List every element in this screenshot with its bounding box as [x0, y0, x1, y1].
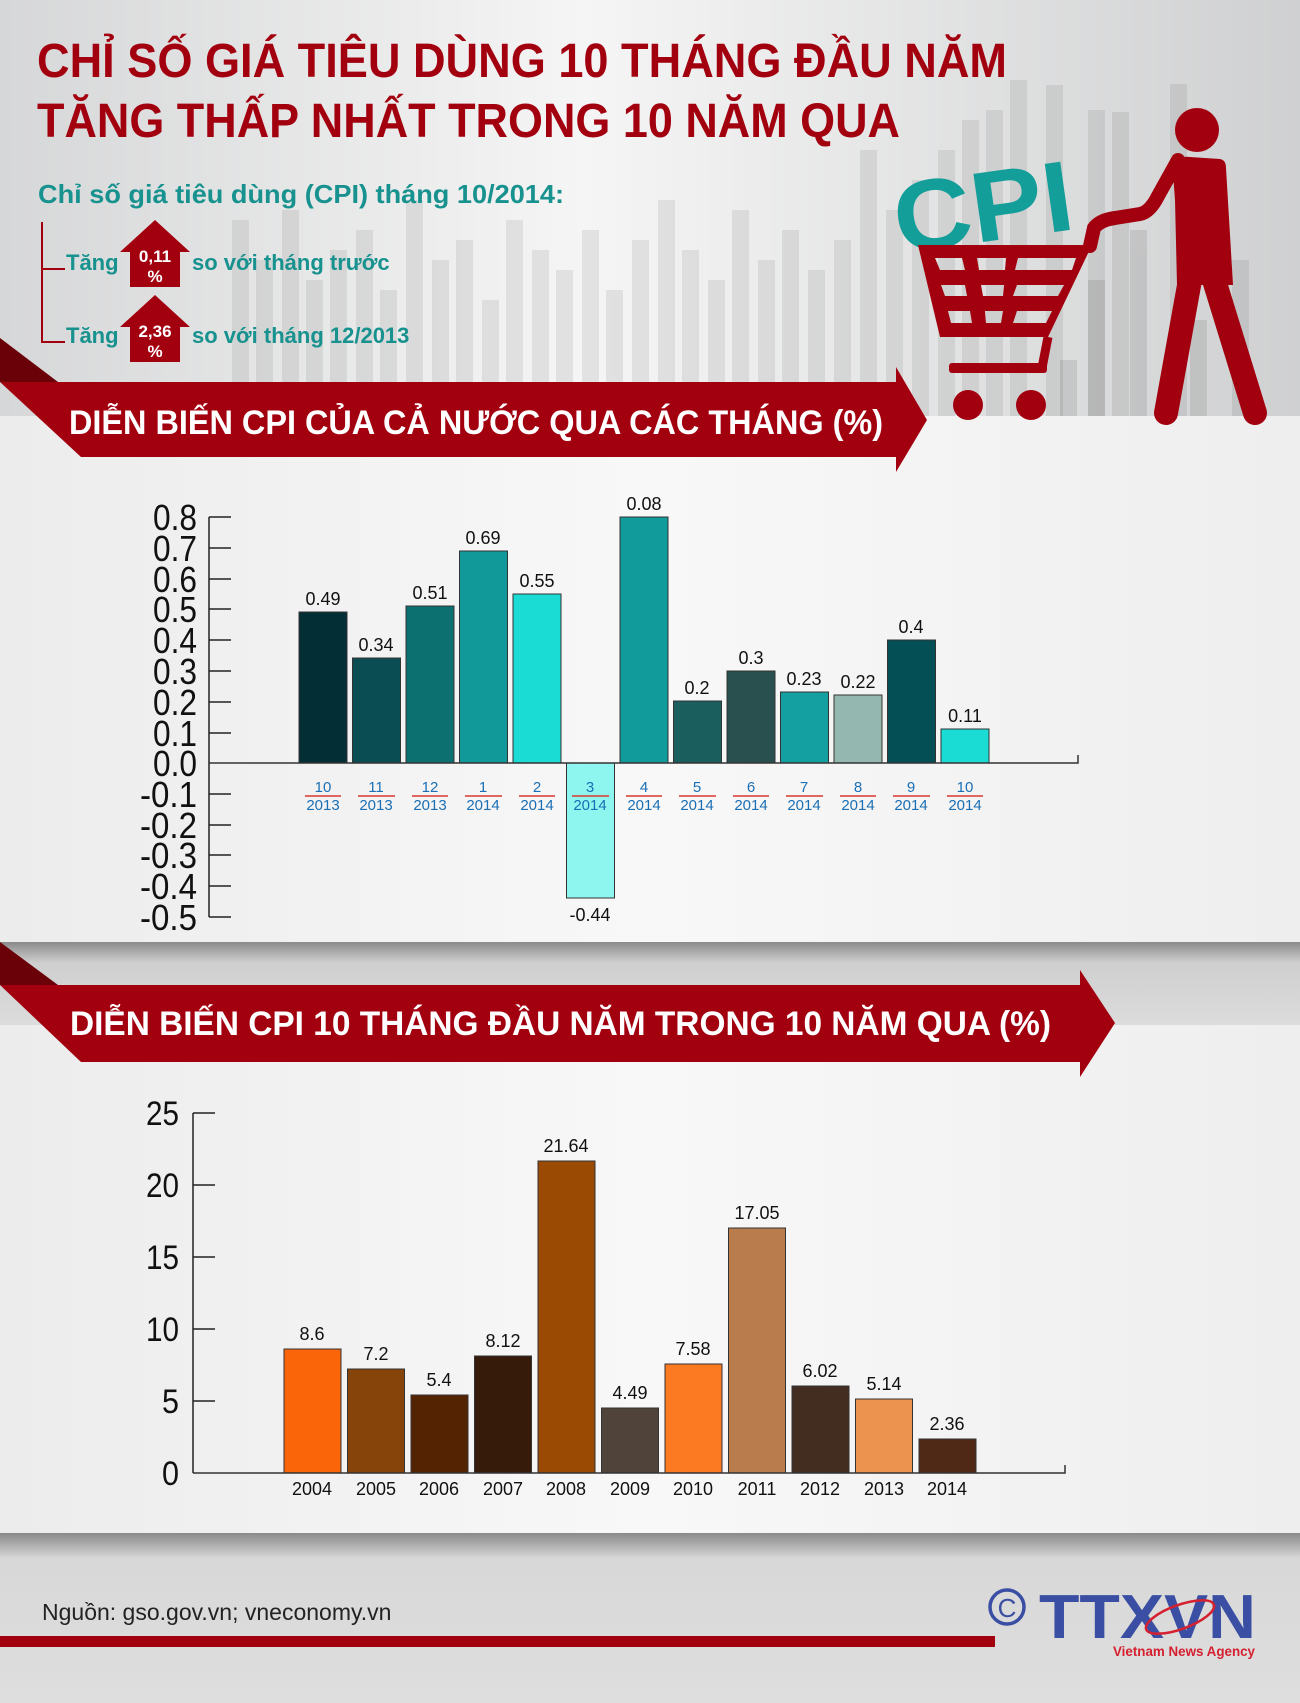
year labels: 2004 [292, 1479, 332, 1499]
month labels: 2014 [466, 797, 500, 814]
y axis: 5 [162, 1383, 179, 1421]
value labels: 0.22 [840, 672, 876, 692]
month labels: 12 [422, 779, 438, 796]
month labels: 8 [854, 779, 862, 796]
value labels: 4.49 [612, 1383, 648, 1403]
value labels: 0.4 [898, 617, 924, 637]
icon: up arrow 0,11 [120, 220, 190, 287]
month labels: 2014 [948, 797, 982, 814]
value labels: 0.2 [684, 678, 710, 698]
value labels: 8.6 [299, 1324, 325, 1344]
y axis: 0.1 [153, 713, 197, 754]
icon: up arrow 2,36: 2,36 [138, 322, 172, 341]
value labels: 0.3 [738, 648, 764, 668]
value labels: 7.2 [363, 1344, 389, 1364]
value labels: 0.55 [519, 571, 555, 591]
value labels: 0.34 [358, 635, 394, 655]
month labels: 2014 [573, 797, 607, 814]
header 1: monthly CPI: DIỄN BIẾN CPI CỦA CẢ NƯỚC QUA CÁC THÁNG (%) [69, 404, 883, 442]
month labels: 2013 [413, 797, 447, 814]
month labels: 2014 [841, 797, 875, 814]
y axis [146, 1095, 215, 1493]
month labels [305, 779, 983, 814]
year labels: 2007 [483, 1479, 523, 1499]
chart: monthly CPI bar chart [140, 494, 1078, 938]
y axis: -0.1 [140, 774, 197, 815]
month labels: 7 [800, 779, 808, 796]
y axis: 0.5 [153, 589, 197, 630]
icon: up arrow 2,36: % [147, 342, 163, 361]
month labels: 11 [368, 779, 384, 796]
illustration: shopper with CPI cart [886, 108, 1255, 420]
y axis: 0.6 [153, 559, 197, 600]
stat: year-to-date increase: Tăng [66, 323, 119, 348]
year labels: 2005 [356, 1479, 396, 1499]
month labels: 2014 [894, 797, 928, 814]
month labels: 2014 [680, 797, 714, 814]
header 1: monthly CPI [0, 338, 927, 472]
logo: TTXVN [990, 1583, 1256, 1659]
month labels: 10 [315, 779, 331, 796]
year labels: 2006 [419, 1479, 459, 1499]
y axis: 0.4 [153, 620, 197, 661]
year labels [292, 1479, 967, 1499]
value labels: 2.36 [929, 1414, 965, 1434]
stat: month increase: Tăng [66, 250, 119, 275]
stat: month increase: so với tháng trước [192, 250, 390, 275]
month labels: 6 [747, 779, 755, 796]
year labels: 2014 [927, 1479, 967, 1499]
y axis: 0.2 [153, 682, 197, 723]
y axis [140, 497, 231, 938]
y axis: -0.5 [140, 897, 197, 938]
red footer line [0, 1636, 995, 1647]
cart [918, 160, 1178, 420]
value labels: 8.12 [485, 1331, 521, 1351]
logo: TTXVN: TTXVN [1039, 1583, 1256, 1652]
value labels: 0.49 [305, 589, 341, 609]
value labels: 17.05 [734, 1203, 780, 1223]
subheading: CPI 10/2014: Chỉ số giá tiêu dùng (CPI) tháng 10/2014: [38, 179, 564, 209]
CPI letters: CPI [886, 140, 1080, 276]
year labels: 2011 [738, 1479, 776, 1499]
title [37, 33, 1007, 148]
month labels: 4 [640, 779, 648, 796]
value labels: 5.14 [866, 1374, 902, 1394]
person [1166, 108, 1255, 413]
stat: year-to-date increase: so với tháng 12/2013 [192, 323, 409, 348]
y axis: 0 [162, 1455, 179, 1493]
y axis: 15 [146, 1239, 179, 1277]
y axis: 10 [146, 1311, 179, 1349]
value labels: 0.08 [626, 494, 662, 514]
logo: TTXVN: C [998, 1593, 1016, 1623]
logo: TTXVN: Vietnam News Agency [1113, 1643, 1255, 1659]
value labels: 0.11 [948, 706, 982, 726]
year labels: 2013 [864, 1479, 904, 1499]
value labels [299, 1136, 965, 1434]
y axis: 0.3 [153, 651, 197, 692]
source note: Nguồn: gso.gov.vn; vneconomy.vn [42, 1599, 391, 1625]
y axis: 0.0 [153, 743, 197, 784]
bars [299, 517, 989, 898]
stat: month increase [66, 220, 390, 287]
month labels: 3 [586, 779, 594, 796]
title: TĂNG THẤP NHẤT TRONG 10 NĂM QUA [37, 94, 900, 148]
month labels: 2014 [734, 797, 768, 814]
y axis: 0.8 [153, 497, 197, 538]
y axis: -0.3 [140, 835, 197, 876]
bars [284, 1161, 976, 1473]
month labels: 5 [693, 779, 701, 796]
icon: up arrow 0,11: % [147, 267, 163, 286]
y axis: 25 [146, 1095, 179, 1133]
icon: up arrow 0,11: 0,11 [139, 247, 171, 266]
value labels: 21.64 [543, 1136, 589, 1156]
y axis: -0.4 [140, 866, 197, 907]
month labels: 10 [957, 779, 973, 796]
month labels: 2013 [306, 797, 340, 814]
value labels: 7.58 [675, 1339, 711, 1359]
value labels: -0.44 [569, 905, 611, 925]
value labels: 6.02 [802, 1361, 838, 1381]
y axis: -0.2 [140, 805, 197, 846]
stat: year-to-date increase [66, 295, 409, 362]
month labels: 2014 [627, 797, 661, 814]
value labels: 0.69 [465, 528, 501, 548]
month labels: 9 [907, 779, 915, 796]
year labels: 2010 [673, 1479, 713, 1499]
value labels: 0.51 [412, 583, 448, 603]
header 2: 10-year CPI: DIỄN BIẾN CPI 10 THÁNG ĐẦU NĂM TRONG 10 NĂM QUA (%) [70, 1005, 1051, 1043]
value labels: 0.23 [786, 669, 822, 689]
icon: up arrow 2,36 [120, 295, 190, 362]
value labels [305, 494, 982, 925]
month labels: 2 [533, 779, 541, 796]
year labels: 2009 [610, 1479, 650, 1499]
month labels: 1 [479, 779, 487, 796]
header 2: 10-year CPI [0, 942, 1115, 1077]
year labels: 2012 [800, 1479, 840, 1499]
chart: yearly CPI bar chart [146, 1095, 1065, 1499]
month labels: 2013 [359, 797, 393, 814]
month labels: 2014 [787, 797, 821, 814]
year labels: 2008 [546, 1479, 586, 1499]
y axis: 0.7 [153, 528, 197, 569]
title: CHỈ SỐ GIÁ TIÊU DÙNG 10 THÁNG ĐẦU NĂM [37, 33, 1007, 88]
value labels: 5.4 [426, 1370, 452, 1390]
bracket [42, 220, 409, 362]
month labels: 2014 [520, 797, 554, 814]
y axis: 20 [146, 1167, 179, 1205]
